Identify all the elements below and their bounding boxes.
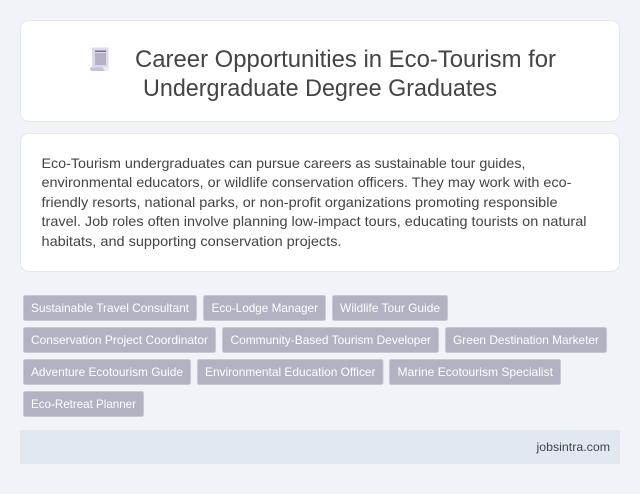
text block: description: travel. Job roles often involve planning low-impact tours, educating tourists on natural [42,213,586,229]
title: Undergraduate Degree Graduates [143,75,497,102]
tag: Conservation Project Coordinator: Conservation Project Coordinator [31,333,208,347]
title: Career Opportunities in Eco-Tourism for [135,46,556,73]
tag: Conservation Project Coordinator [24,328,216,352]
panel: title card [20,20,620,122]
tag: Wildlife Tour Guide: Wildlife Tour Guide [340,301,440,315]
tag: Community-Based Tourism Developer [222,328,438,352]
tag: Eco-Retreat Planner [24,392,144,416]
title [135,46,556,102]
tag: Marine Ecotourism Specialist: Marine Ecotourism Specialist [398,365,554,379]
tag: Marine Ecotourism Specialist [390,360,560,384]
text block: description: Eco-Tourism undergraduates can pursue careers as sustainable tour guides, [42,155,526,171]
panel: description [20,134,620,272]
tag: Green Destination Marketer [446,328,606,352]
footer text: jobsintra.com [535,440,610,454]
tag: Environmental Education Officer [198,360,383,384]
tag: Eco-Lodge Manager: Eco-Lodge Manager [212,301,318,315]
text block: description: environmental educators, or wildlife conservation officers. They may work with eco- [42,174,572,190]
panel: career tags [24,296,606,416]
text block: description: friendly resorts, national parks, or non-profit organizations promoting responsible [42,194,558,210]
tag: Wildlife Tour Guide [332,296,448,320]
tag: Adventure Ecotourism Guide [24,360,190,384]
footer bar [20,430,620,464]
tag: Community-Based Tourism Developer: Community-Based Tourism Developer [230,333,431,347]
tag: Sustainable Travel Consultant [24,296,196,320]
text block: description [42,155,586,249]
tag: Eco-Lodge Manager [204,296,326,320]
tag: Environmental Education Officer: Environmental Education Officer [205,365,376,379]
tag: Sustainable Travel Consultant: Sustainable Travel Consultant [31,301,190,315]
text block: description: habitats, and supporting conservation projects. [42,233,342,249]
tag: Green Destination Marketer: Green Destination Marketer [453,333,599,347]
icon: document scroll [90,48,109,71]
tag: Adventure Ecotourism Guide: Adventure Ecotourism Guide [31,365,183,379]
tag: Eco-Retreat Planner: Eco-Retreat Planner [31,397,136,411]
